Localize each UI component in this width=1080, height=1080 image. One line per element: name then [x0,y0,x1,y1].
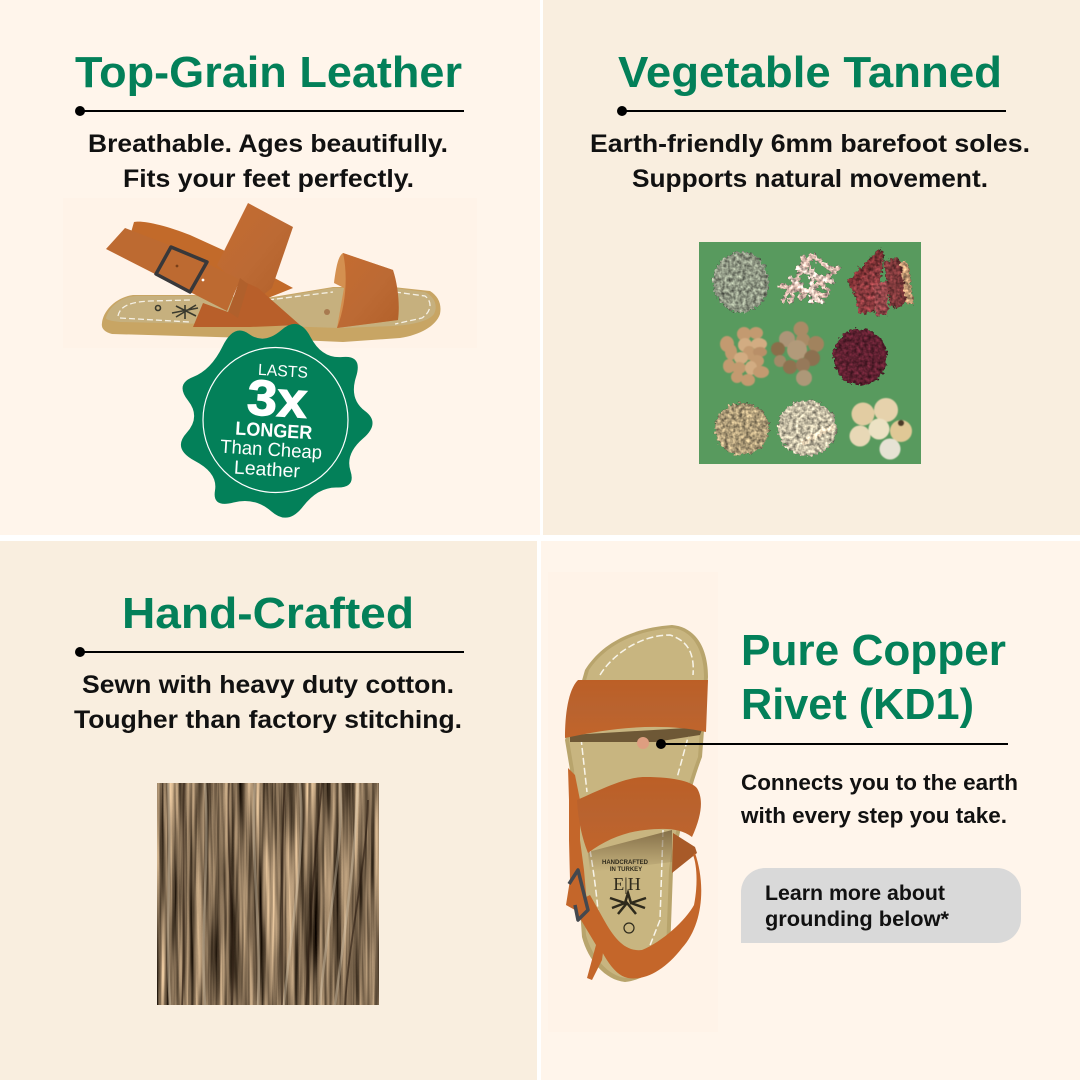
image: cotton thread [157,783,379,1005]
ingredient: tan caps [715,403,769,455]
badge text: LONGER [235,419,313,444]
panel: pure copper rivet [541,541,1080,1080]
badge text: Leather [233,458,301,483]
heading: Pure Copper Rivet (KD1): Rivet (KD1) [741,680,974,729]
sandal insole brand text: E|H [613,874,641,894]
text: stitching benefits [74,671,462,734]
heading divider with dot [75,106,464,116]
text: grounding description [740,770,1018,828]
button: learn more: grounding below* [765,908,950,931]
sandal insole brand text: IN TURKEY [610,867,642,873]
heading: Pure Copper Rivet (KD1) [741,626,1006,729]
heading divider with dot [617,106,1006,116]
text: grounding description: with every step you take. [740,803,1007,828]
heading: Pure Copper Rivet (KD1): Pure Copper [741,626,1006,675]
sandal insole brand text [602,860,649,933]
text: stitching benefits: Sewn with heavy duty cotton. [82,671,454,699]
heading: Vegetable Tanned: Vegetable Tanned [618,48,1002,97]
text: stitching benefits: Tougher than factory stitching. [74,706,462,734]
badge text: LASTS [257,362,308,382]
button: learn more [741,868,1021,943]
ingredient: pale bark strips [781,255,838,303]
panel: top-grain leather [0,0,540,535]
text: leather benefits [88,130,448,193]
ingredient: pale chips [778,400,836,456]
heading: Hand-Crafted: Hand-Crafted [122,589,414,638]
icon: copper rivet [637,737,649,749]
ingredient: tan nuts [720,327,769,386]
image: sandal side view [63,198,477,348]
text: sole benefits: Supports natural movement. [632,165,988,193]
panel: vegetable tanned [543,0,1080,535]
callout line from rivet [656,739,1008,749]
badge: lasts 3x longer [181,324,373,518]
ingredient: dried herbs [713,252,769,312]
textured ingredients [713,248,914,456]
image: sandal top view [548,572,718,1032]
panel: hand-crafted [0,541,537,1080]
ingredient: brown caps [771,322,824,386]
badge text: Than Cheap [220,437,323,464]
text: grounding description: Connects you to the earth [741,770,1018,795]
text: leather benefits: Fits your feet perfectly. [123,165,414,193]
text: leather benefits: Breathable. Ages beautifully. [88,130,448,158]
ingredient: dark maroon flakes [833,329,887,385]
ingredient: red bark [846,248,914,316]
text: sole benefits: Earth-friendly 6mm barefoot soles. [590,130,1030,158]
rounded ingredients [720,322,912,460]
button: learn more: Learn more about [765,882,945,905]
heading divider with dot [75,647,464,657]
image: tanning ingredients on green [699,242,921,464]
badge text [218,360,327,484]
badge text: 3x [246,369,309,429]
ingredient: cream balls [850,398,912,460]
text: sole benefits [590,130,1030,193]
heading: Top-Grain Leather: Top-Grain Leather [75,48,462,97]
sandal insole brand text: HANDCRAFTED [602,860,649,866]
